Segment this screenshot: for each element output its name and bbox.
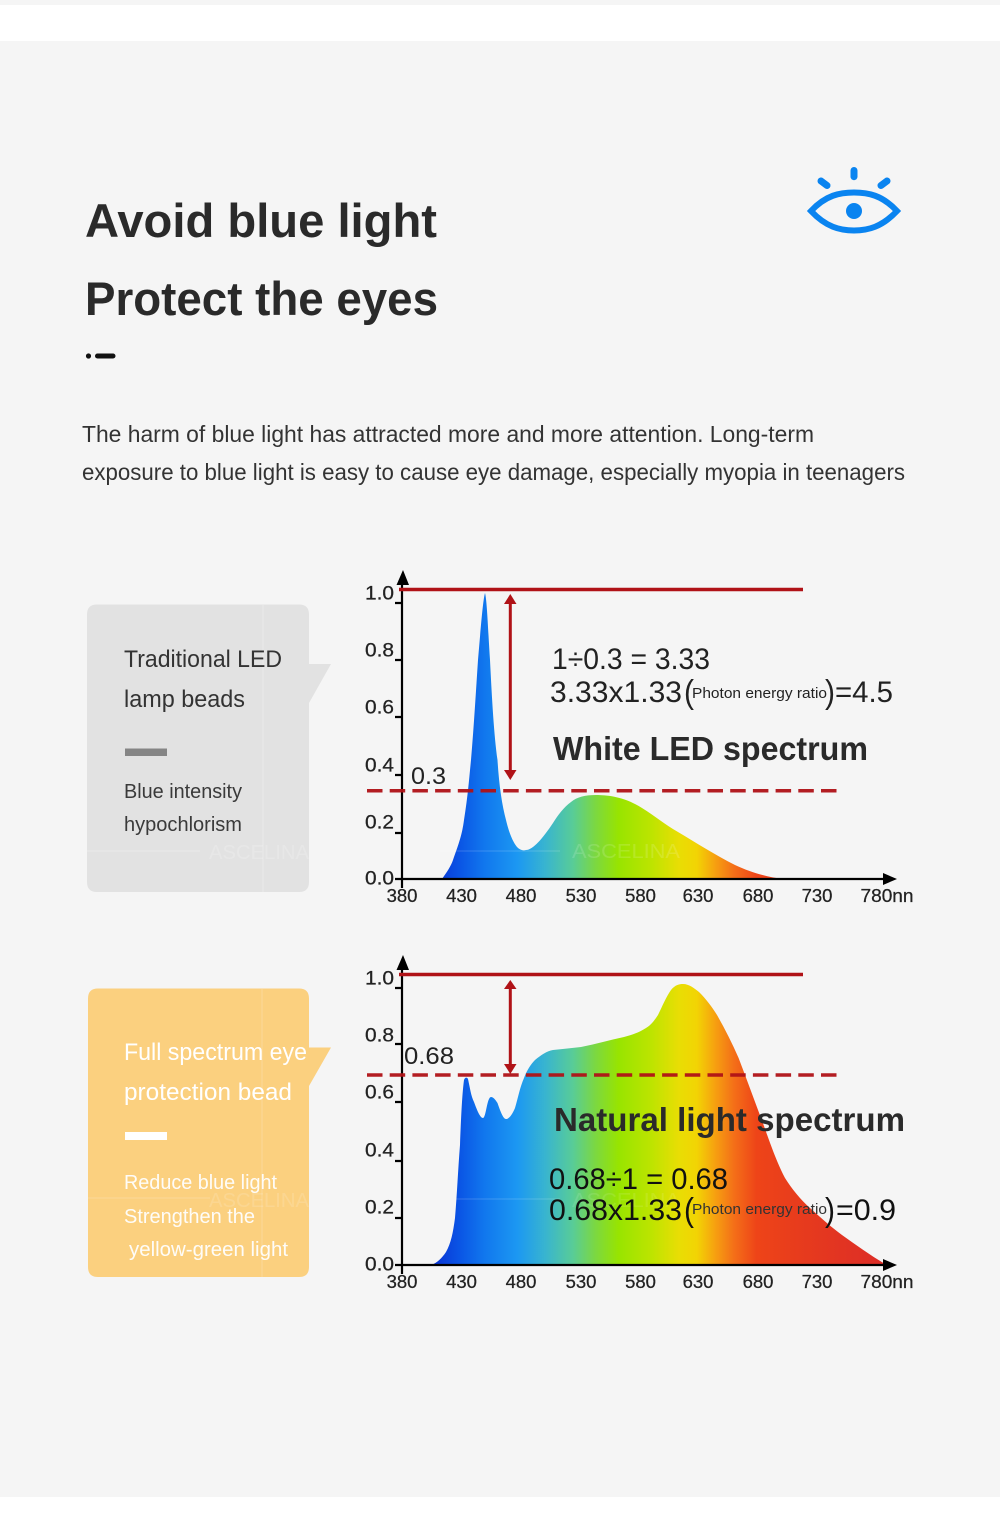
panel divider bar [125, 1132, 167, 1140]
x axis labels [387, 885, 914, 906]
value label: 0.68 [404, 1043, 454, 1070]
panel body text [124, 780, 243, 836]
icon: eye [811, 170, 897, 230]
formula [550, 643, 893, 710]
x axis labels: 780nn [860, 885, 914, 906]
title accent mark [86, 353, 116, 359]
spectrum area [442, 593, 783, 879]
formula: ) [825, 1191, 835, 1228]
panel body text: Blue intensity [124, 780, 243, 803]
intro paragraph [82, 421, 905, 485]
title [85, 194, 438, 325]
panel watermark: ASCELINA [209, 842, 310, 864]
chart name: Natural light spectrum [554, 1101, 905, 1138]
intro paragraph: The harm of blue light has attracted more and more attention. Long-term [82, 421, 814, 447]
panel heading: Full spectrum eye [124, 1039, 307, 1066]
y axis labels: 0.8 [365, 640, 394, 662]
panel heading [124, 646, 282, 713]
panel divider bar [125, 748, 167, 756]
x axis labels: 680 [743, 885, 773, 906]
y axis labels [365, 968, 394, 1276]
y axis labels: 0.6 [365, 696, 394, 718]
panel body text: yellow-green light [129, 1238, 288, 1261]
formula: 0.68x1.33 [549, 1194, 682, 1227]
spectrum area [431, 984, 885, 1265]
x axis labels: 480 [506, 885, 536, 906]
x axis labels: 580 [625, 1271, 656, 1292]
solid reference line [399, 973, 803, 976]
x axis labels: 630 [683, 1271, 713, 1292]
dashed reference line [367, 1073, 838, 1077]
chart: natural light spectrum [365, 955, 914, 1292]
title: Avoid blue light [85, 194, 437, 247]
x axis labels: 780nn [860, 1271, 914, 1292]
panel watermark: ASCELINA [209, 1190, 310, 1212]
y axis labels: 0.0 [365, 1254, 394, 1276]
double arrow [504, 594, 516, 780]
title: Protect the eyes [85, 272, 438, 325]
panel heading: lamp beads [124, 686, 245, 713]
panel: traditional LED [87, 604, 331, 892]
formula: 3.33x1.33 [550, 676, 682, 709]
panel heading: Traditional LED [124, 646, 282, 673]
y axis labels: 0.2 [365, 812, 394, 834]
axis arrowheads [396, 570, 897, 885]
panel body text [124, 1171, 288, 1261]
formula: ( [684, 673, 694, 710]
formula: =4.5 [835, 676, 893, 709]
formula: =0.9 [836, 1194, 896, 1227]
panel body text: Strengthen the [124, 1205, 255, 1228]
x axis labels: 730 [802, 885, 832, 906]
intro paragraph: exposure to blue light is easy to cause eye damage, especially myopia in teenagers [82, 459, 905, 485]
formula [549, 1163, 896, 1228]
y axis labels: 1.0 [365, 968, 394, 990]
solid reference line [399, 588, 803, 591]
x axis labels: 530 [566, 885, 596, 906]
x axis labels: 630 [683, 885, 713, 906]
x axis labels: 530 [566, 1271, 596, 1292]
formula: 0.68÷1 = 0.68 [549, 1163, 728, 1196]
x axis labels: 730 [802, 1271, 832, 1292]
y axis labels: 0.4 [365, 754, 394, 776]
panel body text: hypochlorism [124, 813, 242, 836]
formula: ( [684, 1191, 694, 1228]
value label: 0.3 [411, 763, 446, 790]
watermark: ASCELINA [572, 1190, 681, 1212]
y axis labels: 1.0 [365, 582, 394, 604]
watermark: ASCELINA [572, 841, 681, 863]
y axis labels: 0.0 [365, 868, 394, 890]
double arrow [504, 980, 516, 1074]
panel heading [124, 1039, 307, 1106]
axis arrowheads [396, 955, 897, 1271]
formula: ) [825, 673, 835, 710]
panel heading: protection bead [124, 1079, 292, 1106]
x axis labels: 380 [387, 885, 417, 906]
panel: full spectrum [88, 988, 331, 1277]
y axis labels: 0.6 [365, 1082, 394, 1104]
x axis labels: 580 [625, 885, 656, 906]
y axis labels [365, 582, 394, 890]
chart name: White LED spectrum [553, 730, 868, 767]
formula: Photon energy ratio [692, 686, 827, 702]
x axis labels: 680 [743, 1271, 773, 1292]
panel body text: Reduce blue light [124, 1171, 277, 1194]
formula: 1÷0.3 = 3.33 [552, 643, 710, 676]
y axis labels: 0.2 [365, 1196, 394, 1218]
x axis labels: 430 [446, 885, 477, 906]
x axis labels [387, 1271, 914, 1292]
dashed reference line [367, 789, 838, 793]
x axis labels: 480 [506, 1271, 536, 1292]
chart: white LED spectrum [365, 570, 914, 906]
formula: Photon energy ratio [692, 1202, 827, 1218]
axes [395, 967, 886, 1274]
x axis labels: 380 [387, 1271, 417, 1292]
axes [395, 582, 886, 888]
y axis labels: 0.4 [365, 1140, 394, 1162]
y axis labels: 0.8 [365, 1024, 394, 1046]
x axis labels: 430 [446, 1271, 477, 1292]
